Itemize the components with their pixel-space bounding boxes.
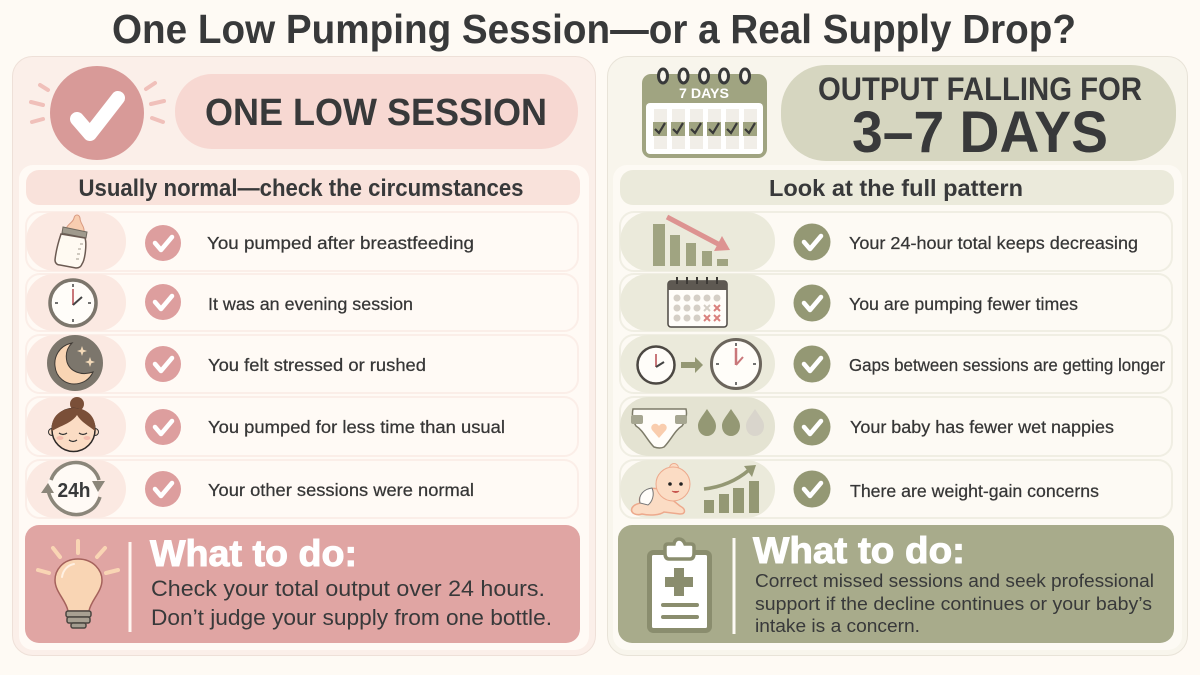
row: other sessions normal: Your other sessions were normal	[208, 480, 474, 500]
row: evening session	[26, 274, 578, 331]
row: evening session: It was an evening session	[208, 294, 413, 314]
icon: check	[794, 284, 830, 322]
icon: baby bottle	[55, 215, 87, 268]
subheading: usually normal: Usually normal—check the circumstances	[78, 175, 524, 202]
subheading: full pattern: Look at the full pattern	[769, 175, 1023, 201]
icon: check	[794, 470, 830, 508]
row: stressed or rushed: You felt stressed or rushed	[208, 355, 426, 375]
row: pumped for less time: You pumped for less time than usual	[208, 417, 505, 437]
callout: what to do: What to do:	[753, 530, 965, 571]
callout: what to do: Check your total output over 24 hours.	[151, 576, 545, 601]
row: 24-hour total: Your 24-hour total keeps decreasing	[849, 233, 1138, 253]
row: pumped after breastfeeding: You pumped after breastfeeding	[207, 233, 474, 253]
heading: output falling: OUTPUT FALLING FOR	[818, 71, 1142, 107]
callout: what to do: support if the decline continues or your baby’s	[755, 593, 1152, 614]
subheading: full pattern	[620, 170, 1174, 205]
icon: check	[794, 408, 830, 446]
heading: one low session	[175, 74, 578, 149]
heading: output falling: 3–7 DAYS	[852, 100, 1108, 165]
row: gaps longer	[620, 335, 1172, 393]
icon: check	[145, 409, 181, 445]
icon: moon	[47, 335, 103, 391]
icon: light bulb	[38, 541, 118, 628]
row: pumped after breastfeeding	[26, 212, 578, 271]
callout: what to do	[25, 525, 580, 643]
row: gaps longer: Gaps between sessions are getting longer	[849, 355, 1165, 375]
icon: clock	[50, 280, 96, 326]
icon: check badge	[31, 66, 164, 160]
row: pumping fewer times: You are pumping fewer times	[849, 294, 1078, 314]
callout: what to do	[618, 525, 1174, 643]
icon: missed calendar	[668, 277, 727, 327]
icon: 24h cycle	[41, 463, 105, 515]
row: pumping fewer times	[620, 274, 1172, 331]
icon: 24h cycle: 24h	[58, 480, 90, 502]
callout: what to do: Don’t judge your supply from one bottle.	[151, 605, 552, 630]
icon: check	[145, 346, 181, 382]
icon: nappy and drops	[631, 409, 764, 448]
heading: one low session: ONE LOW SESSION	[205, 92, 547, 134]
title: One Low Pumping Session—or a Real Supply Drop?	[112, 6, 1076, 52]
icon: check	[794, 346, 830, 382]
icon: check	[145, 225, 181, 261]
icon: check	[145, 284, 181, 320]
row: fewer wet nappies	[620, 397, 1172, 456]
row: fewer wet nappies: Your baby has fewer wet nappies	[850, 417, 1114, 437]
icon: 7 day calendar	[642, 69, 767, 158]
callout: what to do: Correct missed sessions and seek professional	[755, 570, 1154, 591]
icon: check	[145, 471, 181, 507]
icon: check	[794, 224, 830, 260]
icon: medical clipboard	[650, 539, 710, 630]
panel: one low session	[12, 56, 596, 656]
row: stressed or rushed	[26, 335, 578, 393]
heading: output falling	[781, 65, 1176, 165]
row: pumped for less time	[26, 397, 578, 456]
row: weight-gain concerns	[620, 460, 1172, 518]
row: weight-gain concerns: There are weight-gain concerns	[850, 481, 1099, 501]
icon: face	[48, 397, 98, 452]
icon: 7 day calendar: 7 DAYS	[679, 85, 729, 101]
icon: clocks with arrow	[638, 340, 760, 388]
panel: output falling	[608, 56, 1188, 656]
callout: what to do: intake is a concern.	[755, 615, 920, 636]
subheading: usually normal	[26, 170, 580, 205]
icon: declining bars	[653, 217, 730, 266]
callout: what to do: What to do:	[150, 533, 357, 574]
icon: baby and growth chart	[632, 464, 759, 515]
row: other sessions normal	[26, 460, 578, 518]
row: 24-hour total	[620, 212, 1172, 271]
